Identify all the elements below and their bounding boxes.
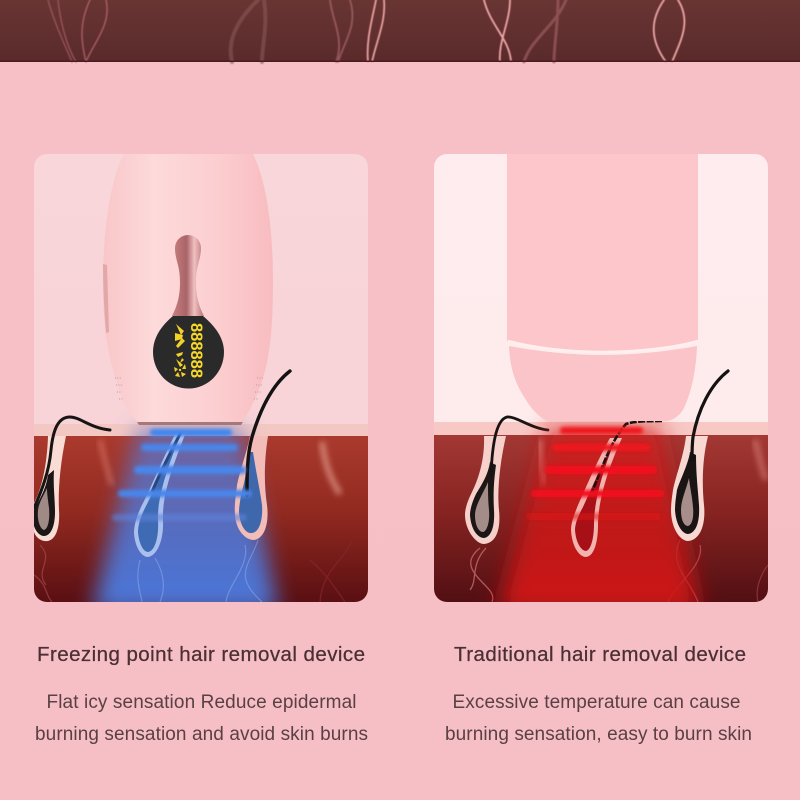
skin layer [34,436,368,602]
centre hair in blue zone [134,432,186,557]
panel: traditional device illustration [434,154,768,612]
skin layer [434,435,768,602]
roots under blue [138,540,262,602]
blue cooling cone [92,428,278,612]
text block: traditional device drawbacks: burning sensation, easy to burn skin [445,724,752,745]
metal stem [172,235,204,316]
side button [103,264,109,333]
right hair in blue zone [235,371,290,540]
display teardrop [153,316,224,389]
red heat cone [498,426,700,612]
device handle [507,154,698,421]
text block: freezing point benefits: Flat icy sensation Reduce epidermal [46,692,356,713]
right hair follicle [671,371,728,541]
vent dots [115,378,263,399]
text block: freezing point benefits: burning sensation and avoid skin burns [35,724,368,745]
red heat bands [526,427,664,520]
left hair follicle [465,417,548,544]
text block: traditional device drawbacks: Excessive temperature can cause [452,692,740,713]
left hair follicle [34,417,110,541]
heading: traditional device: Traditional hair removal device [454,643,746,666]
panel: freezing point device illustration [34,154,368,612]
top band: skin close-up with hair roots [0,0,800,62]
heading: freezing point device: Freezing point hair removal device [37,643,365,666]
text block: freezing point benefits [35,692,368,745]
centre hair in red zone [571,421,662,557]
blue cold bands [112,429,252,521]
display digits: 888888 [187,323,205,378]
display icons [174,324,186,377]
text block: traditional device drawbacks [445,692,752,745]
device handle [103,154,273,425]
